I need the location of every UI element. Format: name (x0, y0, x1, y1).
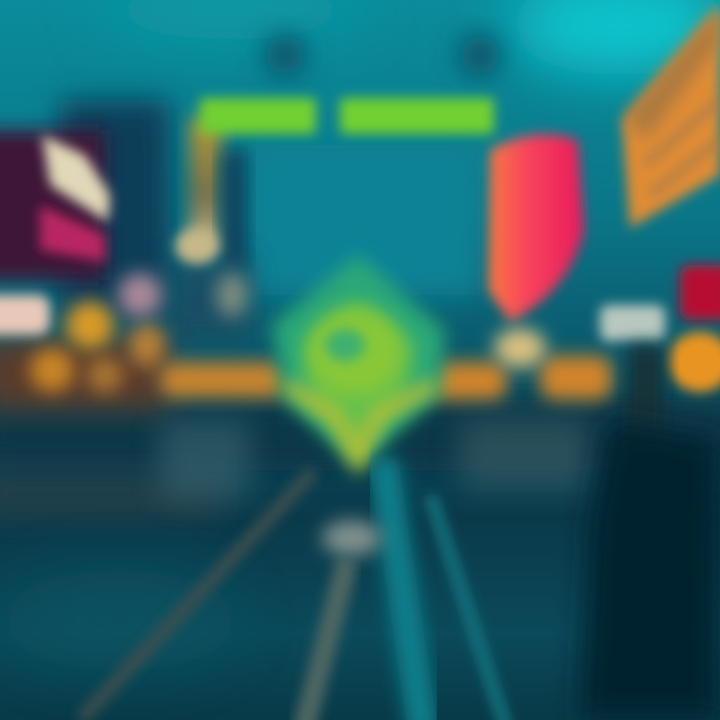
dark overhead lamps (265, 35, 500, 75)
left orange light row (160, 362, 285, 398)
road lane markings (85, 470, 505, 720)
green diamond emblem (272, 255, 445, 468)
street level dark band (0, 400, 720, 470)
top right orange sign (622, 5, 720, 228)
right orange light row (432, 328, 612, 400)
left storefront lights (0, 273, 170, 410)
left magenta building with signs (0, 130, 110, 280)
red and pink right building (488, 134, 584, 322)
blurred green sign heading (200, 98, 494, 134)
central teal screen (248, 145, 480, 295)
road surface (0, 420, 590, 670)
left dark tower (60, 100, 170, 320)
right dark building foreground (580, 420, 720, 720)
golden pillar (170, 118, 250, 340)
right storefront lights (600, 265, 720, 435)
